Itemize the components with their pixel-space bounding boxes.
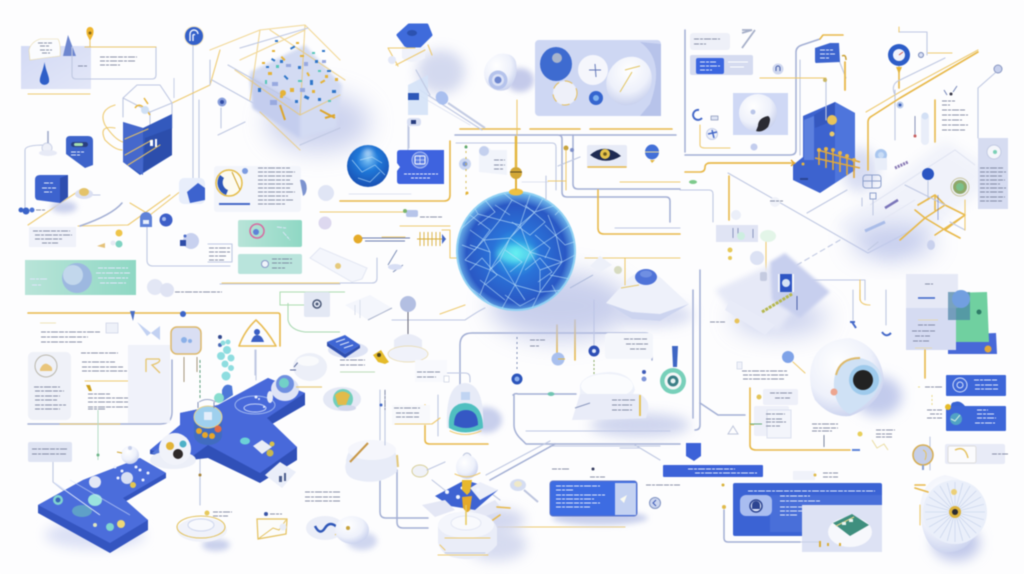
blue isometric cube [123,78,174,175]
text list: right specification [942,86,968,130]
text box: small note [208,244,232,262]
scanner hub device [513,372,690,437]
icon: yellow pin [86,27,94,47]
blue building with pipes [793,102,878,193]
blue medal [588,346,600,375]
caption: globe caption [349,193,411,195]
icon: blue round clock [888,27,952,108]
icon: blue drop [40,62,49,85]
gold-rimmed cloud tile [171,327,201,400]
text: bottom mid left [305,492,340,501]
right top: note card [690,30,755,50]
icon: small gold tip [354,234,410,244]
gold compass and tag [913,444,1008,470]
teal target pendant [642,346,686,394]
bubble pod with figure [150,433,196,469]
small peak node [570,256,625,288]
icon: tube gauge [914,100,935,145]
panel: teal flower card [238,220,302,247]
text card: hub note [605,333,653,359]
icon: blue dot [160,214,172,226]
round pedestal base [438,505,527,561]
icon: small node [218,98,245,135]
small satellite dish [510,479,538,502]
icon: blue tag card [66,136,93,168]
radial wheel device [915,475,987,561]
small domes [290,353,327,381]
blue L-shaped floor [38,458,166,553]
icon: small spheres right of card [300,180,334,230]
blue cross floor [150,378,305,483]
icon: pillow node [147,279,222,297]
teal cup on cross [267,375,322,403]
inset: green tile card [800,505,882,552]
icon: blue cone [63,35,76,56]
yellow connector into building [689,160,795,184]
connector network [25,30,930,528]
icon: blue house [140,212,152,227]
icon: blue orb pair [180,233,199,249]
icons: small gold and teal [97,230,122,248]
glass cubes [265,462,296,488]
panel: blue device showcase [535,40,661,116]
icon: blue valve cluster [18,208,45,214]
dial: line node [459,145,471,195]
text box: top-left note [72,47,156,79]
panel: swirl text card [214,166,301,212]
panel: teal text card [238,254,302,274]
panel: green globe banner [25,260,136,295]
blue isometric tray with gold pins [422,480,525,532]
grey note card [28,442,72,462]
icon: small lamp [39,131,57,156]
dome on L floor [117,446,139,464]
blue globe [347,145,389,187]
icon: blue note tablet [815,43,846,90]
gold swing pedestal [345,390,398,482]
panel: white tray [310,248,377,283]
icon: blue lantern [645,144,659,163]
center cup stack [388,296,428,362]
shadow under central sphere [490,272,630,340]
icon: blue hook lines [710,290,891,335]
icon: round button [646,484,724,508]
note: small card mid [415,360,449,382]
blue balloon pin [922,168,934,200]
teal arch capsule [447,383,502,434]
blue badge card 1 [946,375,1006,396]
text blocks in orange frame [40,323,118,342]
panel: blue code card [550,468,648,525]
big eye sphere [810,338,902,416]
icon: top circle badge [184,26,204,46]
icon: chain ring gadget [693,110,758,150]
pale sign with R glyph [128,322,170,423]
central network sphere [456,178,580,312]
icon: small plug [403,209,442,217]
note: right small label [793,471,838,480]
wave disc [306,516,377,550]
platform with barrel and card [715,251,830,336]
icon: blue shield box [179,178,205,204]
icon: mid lines panel [716,197,783,260]
blue dome cone [606,269,693,327]
icon: frame pins [130,311,186,321]
text card: lower left note [29,227,76,247]
panel: green right sheet [906,274,997,354]
blue hat device [388,25,465,115]
icon: arrows pair [388,250,403,272]
icon: blue capsule [433,89,485,128]
glass cage with figures [194,400,222,445]
text note: capsule [392,405,440,425]
icon: round badge [772,64,784,74]
node: gold dot connector [558,146,580,190]
side card with medallion [28,352,71,420]
icon: turquoise cup [323,387,361,411]
caption: under eye notes [812,424,895,450]
bracket cards [728,389,798,438]
icon: dark eye card [587,145,627,168]
icon: blue sphere node [512,337,565,384]
blue block [35,175,77,213]
teal bubble chain [214,335,234,403]
panel: camera sphere card [733,93,788,135]
gold pipe manifold [900,178,969,240]
panel: right gauge text card [978,138,1008,209]
icon: gold disc [75,188,93,199]
yellow envelope [257,512,287,539]
blue ball on stalk [782,351,805,373]
icon: yellow rose [373,350,389,364]
text: eye caption [737,362,788,379]
warning triangle sign [239,320,276,380]
wave mini chart [345,295,392,320]
isometric lavender platform [835,140,1000,265]
dish on pedestal [177,474,232,551]
panel: big blue dashboard [722,483,882,552]
text fragment: sphere label [522,176,566,200]
text block: frame middle [81,353,160,460]
icon: tiny camera [407,118,421,148]
icon: gold bead [510,136,522,179]
panel: sensor tile with frame [280,292,345,332]
blue keypad [327,335,375,372]
icon: node on top wires [760,78,827,120]
blue shield and long tag [663,443,763,477]
mini disc [412,453,480,479]
pipes: diagonals to clock [866,50,1002,170]
caption: left of badges [918,350,942,418]
data cube with confetti [210,25,370,152]
icon: pale key card [479,146,507,175]
blue badge card 2 [945,402,1006,431]
panel: top-left drop card [21,35,91,94]
panel: blue button card [690,55,753,75]
panel: blue app card [397,150,444,184]
icon: comb filter [400,226,450,246]
eyeball [484,54,534,92]
